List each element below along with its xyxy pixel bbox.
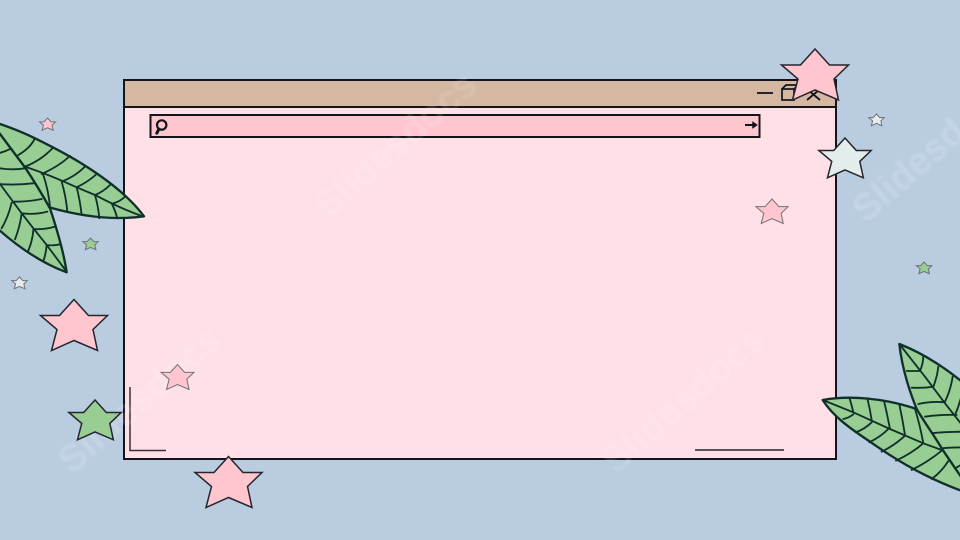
star: green left xyxy=(69,400,121,440)
star: tiny pink top left xyxy=(39,118,56,130)
title bar xyxy=(124,80,836,107)
icon: magnifying glass xyxy=(157,120,166,133)
leaves bottom right xyxy=(823,344,960,495)
star: tiny green right xyxy=(916,262,932,274)
window body xyxy=(124,80,836,459)
leaves top left xyxy=(0,120,144,272)
star: pink in window left xyxy=(161,364,194,389)
star: large pink top right xyxy=(782,49,848,100)
star: pale top right xyxy=(819,138,871,178)
line bottom right xyxy=(695,449,784,451)
watermarks: Slidesdocs xyxy=(306,63,485,227)
leaf: front xyxy=(823,397,960,495)
icon: arrow xyxy=(745,122,758,128)
corner bracket bottom left xyxy=(130,387,166,450)
leaf: back xyxy=(899,344,960,495)
leaf: lower xyxy=(0,120,67,272)
star: large pink bottom xyxy=(195,456,262,508)
icon: maximize box xyxy=(782,85,798,100)
star: tiny green left xyxy=(83,238,98,250)
star: large pink left xyxy=(40,300,108,350)
watermarks xyxy=(50,63,960,482)
star: tiny pale left xyxy=(12,277,27,289)
browser window xyxy=(124,80,836,459)
search bar xyxy=(150,115,760,137)
icon: minimize xyxy=(757,92,773,94)
star: pink in window right xyxy=(756,199,788,223)
watermarks: Slidesdocs xyxy=(50,318,229,482)
watermarks: Slidesdocs xyxy=(594,318,773,482)
leaf: upper xyxy=(0,121,144,218)
star: tiny pale top right xyxy=(869,114,884,126)
icon: close xyxy=(807,90,820,100)
